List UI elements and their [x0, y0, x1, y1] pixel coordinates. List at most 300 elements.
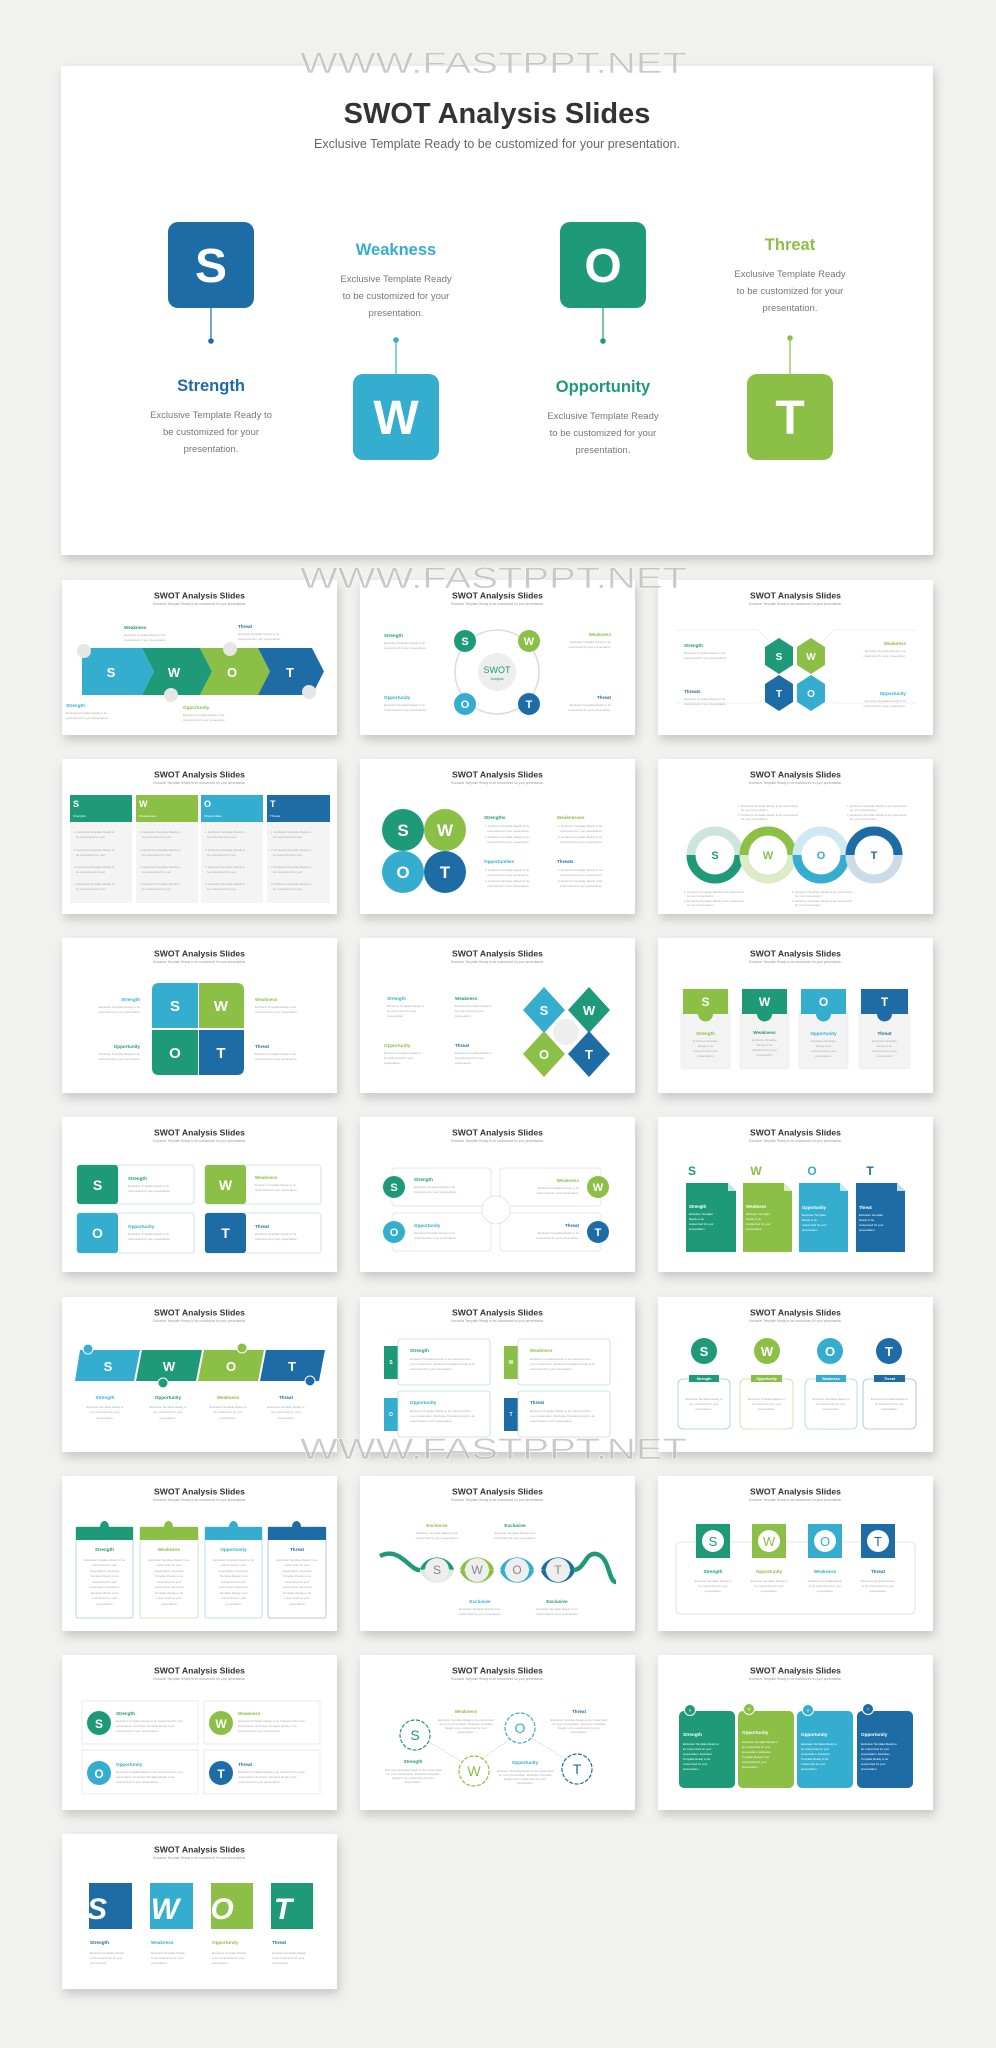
text: Strength: Strength	[177, 377, 245, 395]
slide 18: squares on board: Exclusive Template Ready	[808, 1579, 842, 1583]
slide 16: header tab columns: presentation. Exclusive	[90, 1585, 120, 1589]
slide 16: header tab columns: presentation. Exclusive	[219, 1569, 249, 1573]
slide 5: four circles: customized for your presentation	[560, 884, 602, 888]
slide 3: hexagons: Opportunity	[880, 691, 906, 696]
slide 9: tabbed cards: O	[819, 995, 828, 1009]
slide 8: diamonds: presentation	[455, 1061, 471, 1065]
slide 12: documents: Opportunity	[802, 1205, 827, 1210]
slide 18: squares on board: Exclusive Template Ready	[861, 1579, 895, 1583]
slide 19: boxed circles: presentation. Exclusive Template Ready to be	[116, 1724, 175, 1728]
slide 14: side tab cards: customized for your presentation.	[410, 1367, 453, 1371]
slide 21: colored cards: be customized for your	[683, 1747, 711, 1751]
slide 2: circle cycle: Threat	[597, 695, 611, 700]
S block	[168, 222, 254, 344]
slide 1: chevron: customized for your presentation.	[238, 637, 281, 641]
slide 13: parallelogram band: T	[288, 1359, 296, 1374]
slide 18: squares on board	[658, 1476, 933, 1631]
slide 4: table columns: 1. Exclusive Template Ready to	[271, 830, 312, 834]
slide 16: header tab columns: Template Ready to be	[90, 1574, 119, 1578]
slide 1: chevron: Threat	[238, 624, 253, 629]
slide 5: four circles: 2. Exclusive Template Ready to be	[485, 879, 530, 883]
slide 4: table columns: be customized for your	[207, 887, 236, 891]
slide 17: wave: Exclusive Template Ready to be	[416, 1531, 458, 1535]
text: Weakness	[340, 241, 452, 319]
slide 3: hexagons: Threats	[684, 689, 701, 694]
slide 14: side tab cards: O	[389, 1412, 393, 1418]
slide 18: squares on board: presentation.	[761, 1589, 778, 1593]
slide 7: 2x2 squares: W	[214, 998, 229, 1015]
slide 20: dashed circle network: Ready to be customized for your	[504, 1777, 546, 1781]
slide 4: table columns: 2. Exclusive Template Ready to	[74, 848, 115, 852]
slide 12: documents: customized for your	[859, 1223, 883, 1227]
slide 4: table columns: 2. Exclusive Template Ready to	[140, 848, 181, 852]
slide 6: ring arrows	[658, 759, 933, 914]
slide 2: circle cycle: Opportunity	[384, 695, 411, 700]
text: Strength	[150, 377, 272, 455]
slide 16: header tab columns: customized for your	[284, 1596, 310, 1600]
slide 3: hexagons: Weakness	[884, 641, 906, 646]
slide 13: parallelogram band: Threat	[279, 1395, 293, 1400]
slide 22: italic letter squares: S	[87, 1893, 107, 1926]
slide 4: table columns: 3. Exclusive Template Ready to	[74, 865, 115, 869]
slide 6: ring arrows: O	[817, 850, 826, 862]
slide 21: colored cards: Exclusive Template Ready to	[861, 1742, 897, 1746]
slide 15: circle headers: Exclusive Template Ready to	[812, 1397, 850, 1401]
slide 22: italic letter squares: Exclusive Template Ready	[151, 1951, 185, 1955]
slide 11: quadrant boxes	[360, 1117, 635, 1272]
slide 14: side tab cards: S	[389, 1360, 393, 1366]
slide 20: dashed circle network: Opportunity	[512, 1760, 539, 1765]
slide 18: squares on board: Exclusive Template Ready to	[750, 1579, 788, 1583]
slide 16: header tab columns: Template Ready to be	[283, 1574, 311, 1578]
slide 9: tabbed cards	[658, 938, 933, 1093]
slide 16: header tab columns: Template Ready to be	[90, 1591, 119, 1595]
slide 16: header tab columns: Exclusive Template Ready to be	[276, 1558, 318, 1562]
slide 12: documents: Threat	[859, 1205, 872, 1210]
O block	[560, 222, 646, 344]
slide 7: 2x2 squares: customized for your presentation	[98, 1010, 140, 1014]
slide 4: table columns: 4. Exclusive Template Ready to	[140, 882, 181, 886]
slide 9: tabbed cards: Strength	[696, 1031, 715, 1036]
slide 14: side tab cards: Threat	[530, 1400, 545, 1405]
slide 12: documents: Ready to be	[802, 1218, 818, 1222]
slide 22: italic letter squares: presentation.	[212, 1961, 229, 1965]
slide 6: ring arrows: 1. Exclusive Template Ready to be customized	[847, 804, 907, 808]
slide 9: tabbed cards: presentation	[816, 1054, 832, 1058]
slide 15: circle headers	[658, 1297, 933, 1452]
slide 2: circle cycle: SWOT	[484, 665, 511, 675]
slide 11: quadrant boxes: S	[390, 1182, 398, 1194]
slide 5: four circles: customized for your presentation	[560, 873, 602, 877]
slide 3: hexagons: Exclusive Template Ready to be	[684, 651, 725, 655]
slide 4: table columns: be customized for your	[207, 835, 236, 839]
slide 1: chevron: Exclusive Template Ready to be	[238, 632, 279, 636]
slide 18: squares on board: to be customized for your	[809, 1584, 841, 1588]
slide 17: wave: customized for your presentation.	[494, 1536, 537, 1540]
text: Opportunity: to be customized for your	[550, 428, 656, 439]
slide 5: four circles	[360, 759, 635, 914]
slide 21: colored cards	[658, 1655, 933, 1810]
slide 22: italic letter squares: presentation.	[272, 1961, 289, 1965]
slide 17: wave: Exclusive Template Ready to be	[494, 1531, 536, 1535]
slide 12: documents: O	[807, 1164, 817, 1178]
slide 16: header tab columns: presentation	[161, 1602, 177, 1606]
slide 13: parallelogram band: be customized for your	[153, 1410, 183, 1414]
slide 17: wave: W	[471, 1563, 483, 1577]
slide 15: circle headers: presentation.	[823, 1407, 840, 1411]
slide 3: hexagons: customized for your presentation.	[684, 702, 727, 706]
slide 17: wave: O	[512, 1563, 522, 1577]
slide 15: circle headers: be customized for your	[752, 1402, 781, 1406]
slide 7: 2x2 squares: Exclusive Template Ready to be	[99, 1005, 140, 1009]
slide 9: tabbed cards: Ready to be	[877, 1044, 893, 1048]
slide 6: ring arrows: 1. Exclusive Template Ready to be customized	[792, 890, 852, 894]
slide 12: documents: customized for your	[746, 1222, 770, 1226]
text: Threat	[734, 236, 846, 314]
slide 19: boxed circles: Exclusive Template Ready to be customized for your	[238, 1719, 305, 1723]
slide 20: dashed circle network: Ready to be customized for your	[558, 1726, 600, 1730]
slide 4: table columns: 4. Exclusive Template Ready to	[271, 882, 312, 886]
slide 7: 2x2 squares: customized for your presentation	[255, 1010, 297, 1014]
slide 19: boxed circles: customized for your presentation.	[238, 1729, 281, 1733]
slide 7: 2x2 squares: customized for your presentation	[255, 1057, 297, 1061]
slide 11: quadrant boxes: Strength	[414, 1177, 433, 1182]
slide 21: colored cards: customized for your	[683, 1762, 707, 1766]
slide 2: circle cycle: Analysis	[490, 677, 504, 681]
slide 8: diamonds: O	[539, 1047, 549, 1062]
slide 17: wave: Exclusive	[504, 1523, 526, 1528]
slide 21: colored cards: presentation.	[742, 1765, 758, 1769]
slide 17: wave: customized for your presentation.	[416, 1536, 459, 1540]
slide 16: header tab columns: customized for your	[221, 1580, 246, 1584]
slide 6: ring arrows: 1. Exclusive Template Ready to be customized	[738, 804, 798, 808]
slide 10: boxed cards: customized for your presentation.	[128, 1189, 171, 1193]
slide 5: four circles: Threats	[557, 859, 574, 864]
slide 11: quadrant boxes: Exclusive Template Ready to be	[414, 1185, 455, 1189]
slide 5: four circles: 1. Exclusive Template Ready to be	[485, 868, 530, 872]
slide 21: colored cards: presentation.	[861, 1767, 877, 1771]
slide 22: italic letter squares: W	[151, 1893, 182, 1926]
slide 22: italic letter squares: Exclusive Template Ready	[90, 1951, 124, 1955]
slide 14: side tab cards: T	[509, 1412, 513, 1418]
slide 1: chevron: O	[227, 665, 237, 680]
slide 4: table columns: be customized for your	[273, 853, 302, 857]
slide 20: dashed circle network: Exclusive Template Ready to be customized	[551, 1718, 608, 1722]
slide 21: colored cards: Strength	[683, 1732, 702, 1737]
slide 16: header tab columns: presentation. Exclusive	[219, 1585, 249, 1589]
slide 18: squares on board: Weakness	[814, 1569, 837, 1574]
slide 13: parallelogram band: O	[226, 1359, 236, 1374]
slide 16: header tab columns: Opportunity	[220, 1547, 247, 1552]
slide 22: italic letter squares: Weakness	[151, 1940, 174, 1945]
slide 19: boxed circles: Strength	[116, 1711, 135, 1716]
slide 13: parallelogram band: presentation.	[160, 1416, 177, 1420]
slide 12: documents: Exclusive Template	[859, 1213, 883, 1217]
slide 2: circle cycle: Exclusive Template Ready to be	[570, 640, 611, 644]
slide 11: quadrant boxes: Exclusive Template Ready to be	[538, 1186, 579, 1190]
slide 21: colored cards: Exclusive Template Ready to	[801, 1742, 837, 1746]
watermarks: WWW.FASTPPT.NET	[300, 47, 687, 80]
slide 10: boxed cards: T	[221, 1225, 230, 1241]
slide 2: circle cycle: Exclusive Template Ready to be	[570, 703, 611, 707]
slide 9: tabbed cards: Ready to be	[757, 1043, 773, 1047]
slide 5: four circles: 2. Exclusive Template Ready to be	[485, 835, 530, 839]
slide 10: boxed cards: W	[219, 1177, 233, 1193]
slide 21: colored cards: be customized for your	[742, 1745, 770, 1749]
slide 13: parallelogram band: Exclusive Template Ready to	[267, 1405, 305, 1409]
slide 3: hexagons: Exclusive Template Ready to be	[865, 699, 906, 703]
slide 5: four circles: customized for your presentation	[560, 829, 602, 833]
slide 6: ring arrows: 2. Exclusive Template Ready to be customized	[684, 899, 744, 903]
slide 11: quadrant boxes: Threat	[565, 1223, 579, 1228]
slide 20: dashed circle network: T	[573, 1761, 582, 1777]
slide 3: hexagons: S	[776, 652, 783, 663]
slide 16: header tab columns: Template Ready to be	[155, 1574, 183, 1578]
slide 14: side tab cards: customized for your presentation.	[410, 1419, 453, 1423]
slide 15: circle headers: presentation.	[881, 1407, 898, 1411]
slide 13: parallelogram band: presentation.	[278, 1416, 295, 1420]
slide 16: header tab columns: customized for your	[284, 1563, 310, 1567]
slide 11: quadrant boxes: O	[390, 1227, 399, 1239]
slide 21: colored cards: T	[867, 1708, 870, 1712]
text: Threat: Threat	[765, 236, 816, 254]
slide 21: colored cards: Template Ready to be	[861, 1757, 889, 1761]
slide 18: squares on board: to be customized for your	[862, 1584, 894, 1588]
slide 19: boxed circles: customized for your presentation.	[116, 1780, 159, 1784]
slide 4: table columns: be customized for your	[76, 835, 105, 839]
slide 22: italic letter squares: Exclusive Template Ready	[212, 1951, 246, 1955]
slide 8: diamonds: Exclusive Template Ready to	[387, 1004, 424, 1008]
slide 20: dashed circle network: W	[467, 1763, 481, 1779]
slide 8: diamonds: be customized for your	[384, 1056, 413, 1060]
slide 10: boxed cards: Exclusive Template Ready to be	[255, 1183, 296, 1187]
slide 9: tabbed cards: Ready to be	[816, 1044, 832, 1048]
slide 12: documents: presentation.	[746, 1227, 762, 1231]
slide 7: 2x2 squares: T	[216, 1045, 226, 1062]
slide 4: table columns: be customized for your	[273, 870, 302, 874]
slide 21: colored cards: O	[807, 1708, 810, 1712]
slide 10: boxed cards	[62, 1117, 337, 1272]
slide 16: header tab columns: customized for your	[92, 1596, 117, 1600]
slide 9: tabbed cards: customized for your	[693, 1049, 718, 1053]
slide 12: documents: Exclusive Template	[802, 1213, 826, 1217]
slide 22: italic letter squares	[62, 1834, 337, 1989]
slide 16: header tab columns: Threat	[290, 1547, 304, 1552]
slide 17: wave: Exclusive	[426, 1523, 448, 1528]
slide 13: parallelogram band: presentation.	[220, 1416, 237, 1420]
text: Threat: to be customized for your	[737, 286, 843, 297]
slide 18: squares on board: Exclusive Template Ready to	[694, 1579, 732, 1583]
slide 18: squares on board: T	[874, 1534, 882, 1549]
slide 6: ring arrows: 1. Exclusive Template Ready to be customized	[684, 890, 744, 894]
slide 4: table columns: 3. Exclusive Template Ready to	[140, 865, 181, 869]
slide 22: italic letter squares: to be customized for your	[90, 1956, 122, 1960]
slide 9: tabbed cards: presentation	[698, 1054, 714, 1058]
slide 5: four circles: S	[397, 821, 409, 840]
slide 6: ring arrows: for your presentation	[850, 808, 877, 812]
slide 22: italic letter squares: Opportunity	[212, 1940, 239, 1945]
slide 6: ring arrows: for your presentation	[795, 903, 822, 907]
slide 5: four circles: 2. Exclusive Template Ready to be	[558, 879, 603, 883]
slide 14: side tab cards: your presentation. Exclusive Template Ready to be	[530, 1414, 595, 1418]
text: Weakness: presentation.	[369, 308, 423, 319]
slide 3: hexagons: T	[776, 689, 782, 700]
slide 7: 2x2 squares: Exclusive Template Ready to be	[255, 1052, 296, 1056]
slide 19: boxed circles: Threat	[238, 1762, 253, 1767]
slide 7: 2x2 squares: Exclusive Template Ready to be	[255, 1005, 296, 1009]
slide 12: documents: presentation.	[859, 1228, 875, 1232]
slide 16: header tab columns: presentation. Exclusive	[90, 1569, 120, 1573]
slide 19: boxed circles: O	[94, 1767, 104, 1781]
slide 20: dashed circle network: Exclusive Template Ready to be customized	[385, 1768, 442, 1772]
slide 14: side tab cards: Exclusive Template Ready to be customized for	[530, 1409, 591, 1413]
slide 15: circle headers: presentation.	[696, 1407, 713, 1411]
slide 5: four circles: W	[437, 821, 454, 840]
slide 14: side tab cards: your presentation. Exclusive Template Ready to be	[530, 1362, 595, 1366]
slide 18: squares on board: be customized for your	[754, 1584, 784, 1588]
slide 4: table columns: S	[73, 799, 79, 809]
slide 10: boxed cards: Exclusive Template Ready to be	[128, 1184, 169, 1188]
slide 14: side tab cards: customized for your presentation.	[530, 1367, 573, 1371]
slide 16: header tab columns: Weakness	[158, 1547, 181, 1552]
slide 7: 2x2 squares: Weakness	[255, 997, 278, 1002]
slide 5: four circles: 2. Exclusive Template Ready to be	[558, 835, 603, 839]
slide 15: circle headers: T	[885, 1344, 893, 1359]
slide 17: wave: customized for your presentation.	[459, 1612, 502, 1616]
slide 5: four circles: Opportunities	[484, 859, 515, 864]
slide 20: dashed circle network: for your presentation. Exclusive Template	[387, 1772, 440, 1776]
slide 9: tabbed cards: Exclusive Template	[693, 1039, 718, 1043]
slide 7: 2x2 squares: Exclusive Template Ready to be	[99, 1052, 140, 1056]
slide 4: table columns: 4. Exclusive Template Ready to	[205, 882, 246, 886]
slide 18: squares on board: be customized for your	[698, 1584, 728, 1588]
slide 15: circle headers: S	[700, 1344, 709, 1359]
slide 2: circle cycle: Exclusive Template Ready to be	[384, 703, 425, 707]
slide 15: circle headers: Strength	[697, 1377, 711, 1381]
slide 21: colored cards: Exclusive Template Ready to	[742, 1740, 778, 1744]
slide 6: ring arrows: 2. Exclusive Template Ready to be customized	[738, 813, 798, 817]
text: Opportunity	[547, 378, 659, 456]
slide 14: side tab cards: your presentation. Exclusive Template Ready to be	[410, 1414, 475, 1418]
slide 19: boxed circles: customized for your presentation.	[238, 1780, 281, 1784]
slide 10: boxed cards: O	[92, 1225, 103, 1241]
slide 20: dashed circle network: Exclusive Template Ready to be customized	[497, 1769, 554, 1773]
slide 1: chevron: Strength	[66, 703, 85, 708]
slide 16: header tab columns: Template Ready to be	[155, 1591, 183, 1595]
slide 16: header tab columns: customized for your	[92, 1580, 117, 1584]
slide 12: documents: customized for your	[689, 1222, 713, 1226]
slide 10: boxed cards: S	[93, 1177, 102, 1193]
slide 4: table columns: be customized for your	[76, 853, 105, 857]
slide 2: circle cycle: S	[461, 636, 469, 648]
slide 20: dashed circle network	[360, 1655, 635, 1810]
slide 12: documents: W	[750, 1164, 762, 1178]
slide 17: wave: Exclusive Template Ready to be	[459, 1607, 501, 1611]
slide 21: colored cards: Template Ready to be	[742, 1755, 770, 1759]
slide 4: table columns: be customized for your	[142, 853, 171, 857]
slide 20: dashed circle network: presentation.	[517, 1781, 534, 1785]
slide 5: four circles: customized for your presentation	[560, 840, 602, 844]
T block	[747, 335, 833, 460]
slide 1: chevron: customized for your presentation.	[183, 718, 226, 722]
slide 6: ring arrows: for your presentation	[741, 808, 768, 812]
text: Strength: presentation.	[184, 444, 238, 455]
slide 5: four circles: customized for your presentation	[487, 884, 529, 888]
slide 9: tabbed cards: W	[759, 995, 771, 1009]
slide 12: documents: customized for your	[802, 1223, 826, 1227]
T block: T	[775, 392, 805, 445]
slide 13: parallelogram band: be customized for your	[271, 1410, 301, 1414]
slide 20: dashed circle network: Exclusive Template Ready to be customized	[438, 1718, 495, 1722]
slide 20: dashed circle network: Strength	[404, 1759, 423, 1764]
slide 16: header tab columns: customized for your	[221, 1563, 246, 1567]
slide 21: colored cards: presentation. Exclusive	[861, 1752, 890, 1756]
slide 13: parallelogram band: Exclusive Template Ready to	[149, 1405, 187, 1409]
slide 19: boxed circles: Exclusive Template Ready to be customized for your	[116, 1770, 183, 1774]
slide 18: squares on board: S	[709, 1534, 718, 1549]
slide 1: chevron: Exclusive Template Ready to be	[124, 633, 165, 637]
slide 21: colored cards: Exclusive Template Ready to	[683, 1742, 719, 1746]
slide 4: table columns: Threats	[270, 814, 281, 818]
slide 13: parallelogram band: presentation.	[97, 1416, 114, 1420]
slide 1: chevron	[62, 580, 337, 735]
slide 8: diamonds: Exclusive Template Ready to	[384, 1051, 421, 1055]
slide 16: header tab columns: presentation	[97, 1602, 113, 1606]
slide 22: italic letter squares: to be customized for your	[151, 1956, 183, 1960]
slide 6: ring arrows: 2. Exclusive Template Ready to be customized	[847, 813, 907, 817]
slide 8: diamonds: T	[585, 1047, 593, 1062]
slide 16: header tab columns: customized for your	[92, 1563, 117, 1567]
slide 11: quadrant boxes: Opportunity	[414, 1223, 441, 1228]
slide 12: documents: Ready to be	[859, 1218, 875, 1222]
slide 21: colored cards: Opportunity	[742, 1730, 769, 1735]
slide 20: dashed circle network: Weakness	[455, 1709, 478, 1714]
slide 14: side tab cards: customized for your presentation.	[530, 1419, 573, 1423]
slide 19: boxed circles: presentation. Exclusive Template Ready to be	[238, 1724, 297, 1728]
text: Opportunity: Opportunity	[556, 378, 651, 396]
slide 16: header tab columns: customized for your	[156, 1563, 182, 1567]
slide 21: colored cards: Opportunity	[861, 1732, 888, 1737]
slide 16: header tab columns: presentation	[226, 1602, 242, 1606]
slide 11: quadrant boxes: Weakness	[557, 1178, 579, 1183]
text: Weakness: Weakness	[356, 241, 436, 259]
slide 22: italic letter squares: presentation.	[90, 1961, 107, 1965]
slide 18: squares on board: O	[820, 1534, 830, 1549]
slide 18: squares on board: presentation.	[817, 1589, 834, 1593]
slide 4: table columns: 2. Exclusive Template Ready to	[271, 848, 312, 852]
slide 5: four circles: customized for your presentation	[487, 873, 529, 877]
slide 7: 2x2 squares: Threat	[255, 1044, 270, 1049]
slide 20: dashed circle network: S	[410, 1727, 420, 1743]
slide 6: ring arrows: W	[763, 850, 774, 862]
slide 4: table columns: be customized for your	[207, 870, 236, 874]
slide 16: header tab columns: Template Ready to be	[283, 1591, 311, 1595]
slide 6: ring arrows: for your presentation	[687, 894, 714, 898]
slide 9: tabbed cards: customized for your	[752, 1048, 777, 1052]
slide 16: header tab columns: Exclusive Template Ready to be	[148, 1558, 190, 1562]
slide 19: boxed circles: S	[95, 1717, 103, 1731]
slide 21: colored cards: Template Ready to be	[683, 1757, 711, 1761]
slide 12: documents: Weakness	[746, 1204, 767, 1209]
slide 8: diamonds: Threat	[455, 1043, 470, 1048]
slide 19: boxed circles	[62, 1655, 337, 1810]
slide 4: table columns: O	[204, 799, 211, 809]
slide 12: documents	[658, 1117, 933, 1272]
slide 13: parallelogram band: S	[104, 1359, 113, 1374]
slide 11: quadrant boxes: Exclusive Template Ready to be	[414, 1231, 455, 1235]
slide 2: circle cycle: customized for your presentation.	[384, 708, 427, 712]
slide 19: boxed circles: T	[217, 1767, 225, 1781]
